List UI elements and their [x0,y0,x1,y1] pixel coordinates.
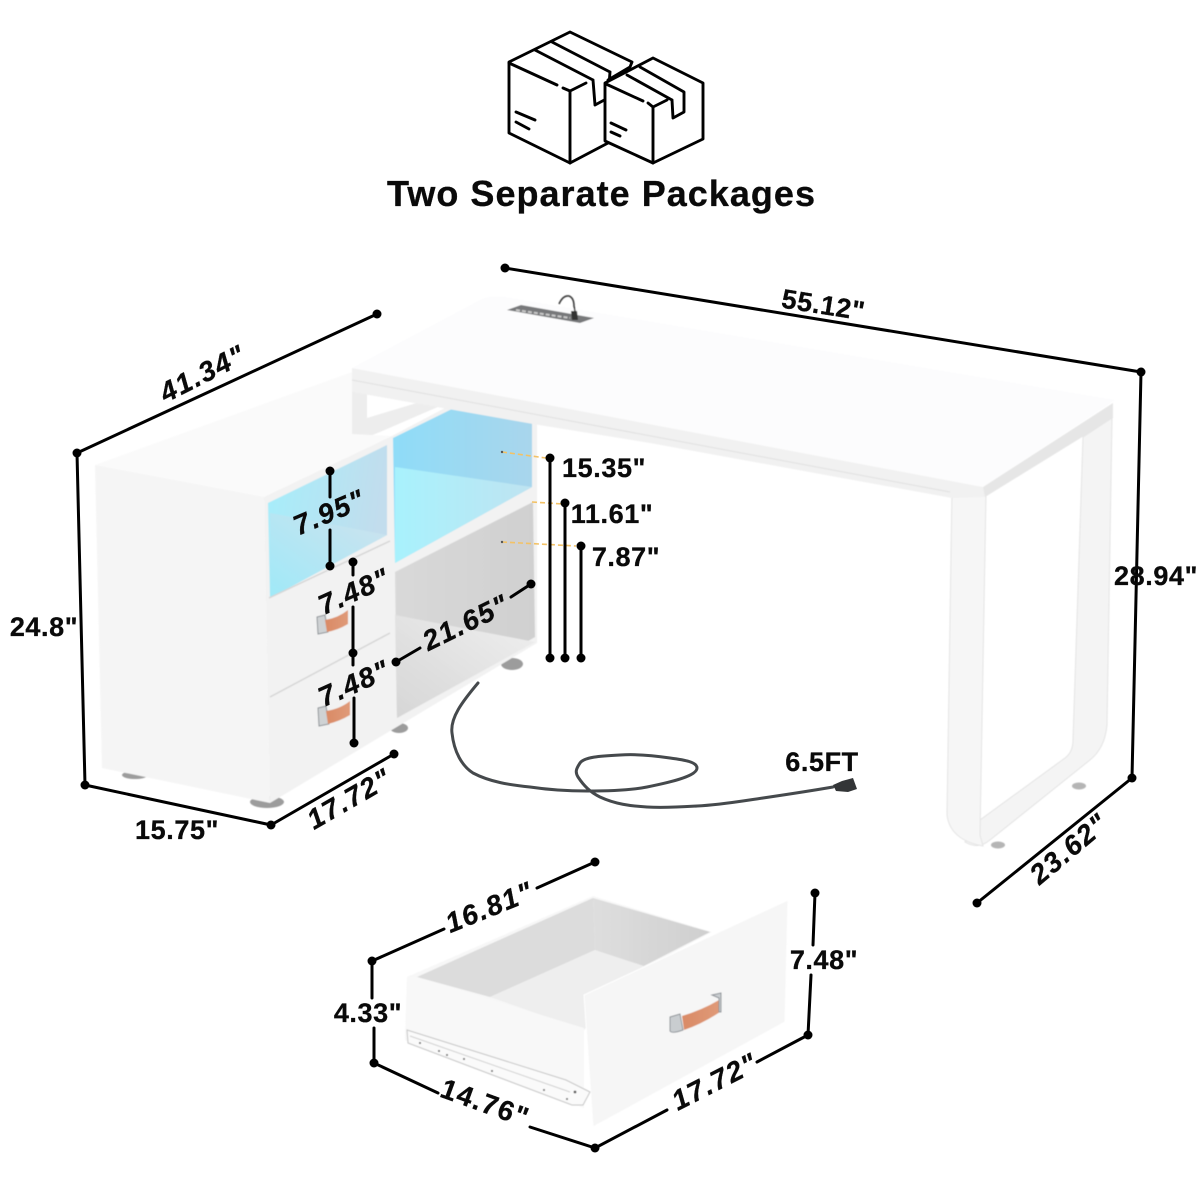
dimension: shelf height 7.87 [576,542,660,662]
cabinet front panel [264,408,537,803]
dimension: drawer front width 17.72: 17.72" [667,1047,763,1116]
drawer slide rail [407,1030,590,1105]
dimension: drawer front height 7.48: 7.48" [790,945,858,975]
dimension: shelf height 11.61 [560,498,653,662]
drawer seams [269,541,390,697]
dimension: upper drawer 7.48 [313,558,395,658]
dimension: drawer front width 17.72 [595,1030,812,1148]
title: Two Separate Packages [387,173,815,214]
dimension: desk width 23.62 [972,778,1132,908]
dimension: niche height 7.95 [289,466,370,570]
drawer handle: upper [317,610,348,634]
icon: large box [509,32,632,163]
drawer outer rim [405,896,712,1108]
left lit niche [268,445,387,598]
lower open shelf [395,502,535,718]
dimension: lower drawer 7.48: 7.48" [313,654,395,713]
right lit niche [393,409,532,563]
dimension: cabinet height 24.8 [10,453,90,790]
desk rear frame under top [352,372,440,438]
dimension: shelf height 15.35: 15.35" [562,453,646,483]
dimension: desk height 28.94: 28.94" [1114,561,1198,591]
drawer floor [490,950,650,1030]
drawer inner left wall [417,898,595,997]
plug [833,778,857,792]
dimension: shelf height 11.61: 11.61" [571,499,653,529]
dimension: lower drawer 7.48 [313,653,395,748]
dimension: desk length 55.12: 55.12" [780,284,867,326]
dimension: shelf width 21.65: 21.65" [417,588,514,657]
illustration: L-shaped desk [95,296,1115,848]
drawer inner back wall [593,898,710,968]
dimension: upper drawer 7.48: 7.48" [313,562,395,621]
leg levelling feet [991,842,1005,848]
desktop surface [352,296,1115,487]
illustration: drawer [405,896,788,1127]
dimension: drawer front height 7.48 [790,888,858,1035]
back leg and foot loop [965,418,1112,846]
dimension: cabinet width 17.72: 17.72" [302,762,397,835]
label: cord length: 6.5FT [785,747,859,777]
drawer front panel [584,900,788,1127]
dimension: cabinet height 24.8: 24.8" [10,612,78,642]
drawer handle: lower [318,701,350,726]
dimension: cabinet depth 15.75 [85,785,276,845]
desk legs [947,418,1112,848]
dimension: drawer inner length 16.81 [368,858,600,966]
dimension: shelf height 15.35 [546,453,646,662]
dimension: shelf height 7.87: 7.87" [592,542,660,572]
dimension: drawer inner width 14.76: 14.76" [437,1073,534,1133]
dimension: drawer inner height 4.33 [334,961,402,1068]
icon: small box [605,58,703,163]
power grommet [507,296,594,323]
icon: two packages [509,32,703,163]
orange leader dashes [501,451,576,546]
dimension: drawer inner height 4.33: 4.33" [334,998,402,1028]
front leg [947,490,986,846]
drawer left panel [405,977,584,1108]
desktop front frame [352,368,985,498]
desktop side edge [983,403,1113,497]
drawer handle [670,993,721,1032]
dimension: cabinet width 17.72 [271,750,398,835]
dimension: return length 41.34: 41.34" [154,339,251,409]
dimension: drawer inner length 16.81: 16.81" [441,876,538,939]
dimension: cabinet depth 15.75: 15.75" [135,815,219,845]
cabinet feet [122,658,523,808]
dimension: return length 41.34 [72,310,382,458]
dimension: niche height 7.95: 7.95" [289,483,370,541]
dimension: desk height 28.94 [1114,372,1198,782]
dimension: desk length 55.12 [500,264,1146,376]
dimension: shelf width 21.65 [392,580,536,666]
dimension: drawer inner width 14.76 [374,1063,600,1152]
dimension: desk width 23.62: 23.62" [1023,807,1114,891]
cabinet side panel [95,465,270,803]
cabinet top [95,372,392,497]
power cord [452,683,857,807]
